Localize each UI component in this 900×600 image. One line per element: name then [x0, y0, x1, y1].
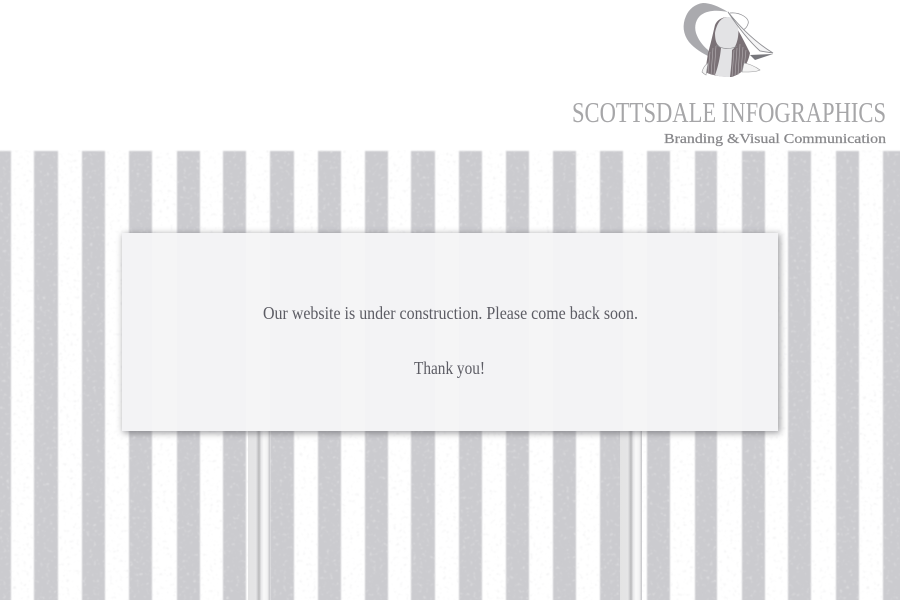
- logo: woman in wide-brimmed hat: [684, 3, 773, 77]
- sign panel: [122, 233, 780, 433]
- face and neck: [715, 17, 738, 77]
- striped background: [0, 150, 900, 600]
- shoulders: [702, 63, 760, 75]
- hat top outline: [716, 13, 748, 49]
- hat brim crescent: [684, 3, 728, 57]
- hair strands: [708, 44, 746, 77]
- thank you text: Thank you!: [414, 358, 485, 378]
- tagline: Branding &Visual Communication: [664, 132, 886, 147]
- hair: [705, 17, 750, 77]
- sign post: right: [620, 431, 642, 600]
- sign post: left: [248, 431, 270, 600]
- message text: Our website is under construction. Please come back soon.: [263, 303, 638, 323]
- hat front brim: [728, 12, 773, 53]
